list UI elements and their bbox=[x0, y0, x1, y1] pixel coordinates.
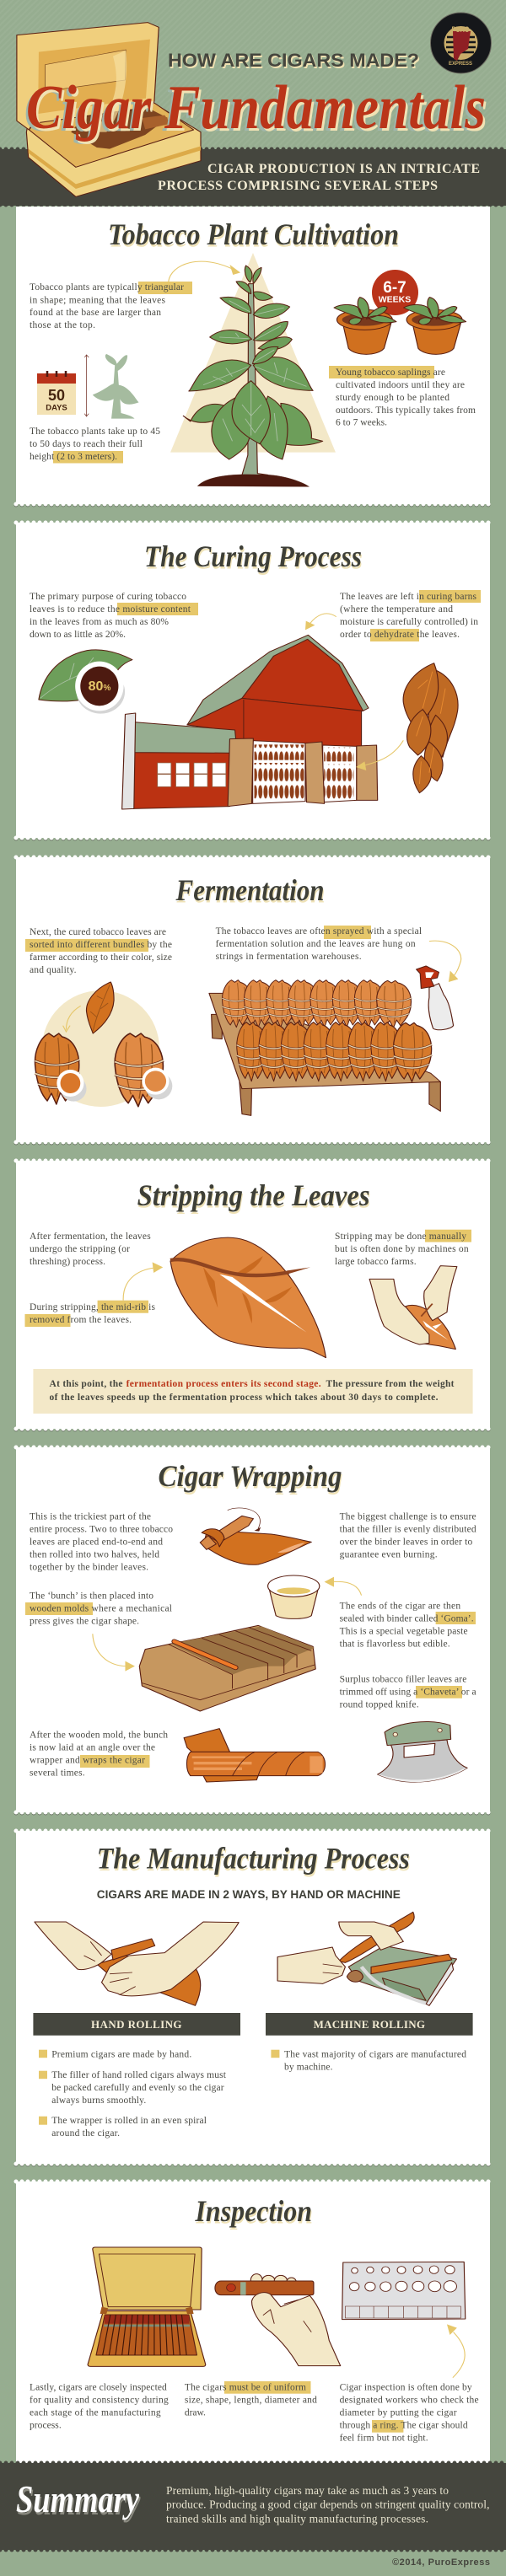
text: plant height: to 50 days to reach their full bbox=[30, 439, 143, 449]
text: trickiest part: leaves are placed end-to-end and bbox=[30, 1538, 163, 1548]
summary title: Summary bbox=[17, 2480, 141, 2523]
panel: manufacturing process bbox=[16, 1831, 490, 2165]
text: biggest challenge: The biggest challenge is to ensure bbox=[340, 1512, 476, 1522]
text: triangular shape: in shape; meaning that the leaves bbox=[30, 295, 166, 305]
text: triangular shape: Tobacco plants are typically triangular bbox=[30, 282, 184, 292]
text: spraying: strings in fermentation warehouses. bbox=[216, 952, 362, 962]
tagline: HOW ARE CIGARS MADE? bbox=[168, 50, 419, 71]
chaveta knife bbox=[378, 1722, 467, 1782]
text: curing barns bbox=[340, 590, 481, 641]
text: manual bbox=[335, 1230, 471, 1267]
list: hand rolling: around the cigar. bbox=[51, 2128, 120, 2139]
text: goma: The ends of the cigar are then bbox=[340, 1602, 460, 1612]
text: ring check: designated workers who check the bbox=[340, 2396, 479, 2406]
icon: leaf with 80%: 80% bbox=[89, 679, 110, 694]
hand rolling illustration bbox=[35, 1922, 239, 2005]
text: trickiest part: entire process. Two to three tobacco bbox=[30, 1525, 173, 1535]
heading: The Manufacturing Process bbox=[97, 1842, 410, 1876]
panel: inspection bbox=[16, 2182, 490, 2465]
text: trickiest part: This is the trickiest part of the bbox=[30, 1512, 151, 1522]
ring gauge bbox=[342, 2262, 466, 2378]
heading: Stripping the Leaves bbox=[138, 1180, 371, 1214]
panel: stripping the leaves bbox=[16, 1161, 490, 1430]
text: plant height bbox=[30, 427, 160, 464]
text: threshing bbox=[30, 1232, 151, 1267]
text: wrap the cigar: is now laid at an angle over the bbox=[30, 1743, 155, 1753]
text: chaveta: trimmed off using a ‘Chaveta’ or a bbox=[340, 1688, 476, 1698]
text: saplings: outdoors. This typically takes from bbox=[336, 405, 476, 416]
machine rolling label bbox=[266, 2013, 473, 2036]
list: machine rolling: The vast majority of cigars are manufactured bbox=[284, 2049, 466, 2059]
callout: second stage bbox=[33, 1369, 473, 1414]
summary band bbox=[0, 2463, 506, 2550]
text: saplings: 6 to 7 weeks. bbox=[336, 418, 387, 428]
text: manual: but is often done by machines on bbox=[335, 1244, 469, 1254]
icon: 6-7 weeks badge and pots bbox=[334, 270, 466, 354]
text: goma: that is flavorless but edible. bbox=[340, 1640, 450, 1650]
text: quality inspection: Lastly, cigars are closely inspected bbox=[30, 2383, 167, 2393]
text: saplings: cultivated indoors until they are bbox=[336, 380, 465, 390]
text: uniform size: The cigars must be of uniform bbox=[185, 2383, 306, 2393]
text: ring check: diameter by putting the cigar bbox=[340, 2408, 457, 2418]
badge logo: PURO bbox=[452, 25, 469, 34]
panel: cigar wrapping bbox=[16, 1447, 490, 1813]
spray bottle bbox=[428, 984, 454, 1030]
text: saplings bbox=[329, 366, 476, 428]
text: curing barns: order to dehydrate the leaves. bbox=[340, 630, 460, 640]
subtitle: CIGAR PRODUCTION IS AN INTRICATE bbox=[207, 162, 480, 176]
text: wrap the cigar: After the wooden mold, the bunch bbox=[30, 1731, 168, 1741]
list: hand rolling: Premium cigars are made by hand. bbox=[51, 2049, 191, 2059]
text: plant height: The tobacco plants take up to 45 bbox=[30, 427, 160, 437]
header bbox=[0, 0, 506, 206]
text: ring check bbox=[340, 2383, 479, 2444]
callout: second stage: of the leaves speeds up the fermentation process which takes about 30 days to complete. bbox=[49, 1393, 439, 1403]
text: threshing: undergo the stripping (or bbox=[30, 1244, 130, 1254]
text: goma: This is a special vegetable paste bbox=[340, 1627, 468, 1637]
machine rolling label: MACHINE ROLLING bbox=[314, 2018, 425, 2031]
text: curing barns: (where the temperature and bbox=[340, 604, 453, 614]
text: quality inspection: for quality and consistency during bbox=[30, 2396, 169, 2406]
text: biggest challenge bbox=[340, 1512, 476, 1560]
icon: calendar 50 days: 50 bbox=[48, 387, 65, 404]
summary title: Summary bbox=[16, 2477, 139, 2520]
text: spraying: The tobacco leaves are often sprayed with a special bbox=[216, 926, 422, 936]
text: biggest challenge: guarantee even burning. bbox=[340, 1550, 438, 1560]
callout: second stage: The pressure from the weight bbox=[326, 1379, 455, 1389]
summary text: Premium, high-quality cigars may take as much as 3 years to bbox=[166, 2484, 449, 2497]
copyright: ©2014, PuroExpress bbox=[392, 2557, 490, 2568]
heading: Tobacco Plant Cultivation bbox=[108, 217, 399, 251]
wrapping illustrations bbox=[93, 1508, 467, 1782]
text: saplings: sturdy enough to be planted bbox=[336, 393, 449, 403]
callout: second stage: fermentation process enters its second stage. bbox=[126, 1379, 321, 1389]
text: wooden molds: wooden molds where a mechanical bbox=[30, 1603, 172, 1613]
panel: fermentation bbox=[16, 857, 490, 1143]
barn illustration bbox=[122, 614, 458, 809]
text: uniform size: draw. bbox=[185, 2408, 206, 2418]
callout: second stage: At this point, the bbox=[49, 1379, 123, 1389]
text: quality inspection: process. bbox=[30, 2421, 62, 2431]
text: curing barns: The leaves are left in curing barns bbox=[340, 592, 477, 602]
text: quality inspection: each stage of the manufacturing bbox=[30, 2408, 161, 2418]
hanging leaves bbox=[403, 663, 458, 793]
list: machine rolling bbox=[271, 2049, 466, 2072]
text: wooden molds: The ‘bunch’ is then placed into bbox=[30, 1591, 153, 1601]
text: saplings: Young tobacco saplings are bbox=[336, 368, 445, 378]
text: threshing: After fermentation, the leaves bbox=[30, 1232, 151, 1242]
text: goma: sealed with binder called ‘Goma’. bbox=[340, 1614, 474, 1624]
sorting illustration bbox=[35, 982, 172, 1107]
summary text: trained skills and high quality manufacturing processes. bbox=[166, 2512, 428, 2525]
list: hand rolling bbox=[39, 2049, 227, 2139]
text: uniform size bbox=[185, 2381, 317, 2418]
icon: 6-7 weeks badge and pots: 6-7 bbox=[383, 279, 406, 297]
days bbox=[93, 354, 139, 419]
text: threshing: threshing) process. bbox=[30, 1257, 105, 1267]
text: ring check: through a ring. The cigar should bbox=[340, 2421, 468, 2431]
text: sorting: sorted into different bundles by the bbox=[30, 940, 172, 950]
text: mid-rib: removed from the leaves. bbox=[30, 1315, 132, 1325]
heading: Fermentation bbox=[176, 875, 326, 909]
icon: leaf with 80% bbox=[39, 650, 132, 714]
summary text: produce. Producing a good cigar depends on stringent quality control, bbox=[166, 2498, 489, 2511]
text: sorting: and quality. bbox=[30, 965, 77, 975]
goma cup bbox=[268, 1575, 362, 1618]
hand holding cigar bbox=[215, 2274, 341, 2366]
text: mid-rib bbox=[25, 1301, 156, 1327]
icon: calendar 50 days: DAYS bbox=[46, 403, 67, 413]
heading: Inspection bbox=[195, 2194, 312, 2228]
text: triangular shape: found at the base are larger than bbox=[30, 308, 161, 318]
panel: curing process bbox=[16, 523, 490, 839]
cigar box with cigars bbox=[88, 2247, 206, 2366]
hand rolling label bbox=[33, 2013, 240, 2036]
subheading: CIGARS ARE MADE IN 2 WAYS, BY HAND OR MACHINE bbox=[97, 1887, 401, 1901]
subtitle: PROCESS COMPRISING SEVERAL STEPS bbox=[158, 179, 438, 193]
list: machine rolling: by machine. bbox=[284, 2062, 333, 2072]
text: moisture: in the leaves from as much as 80% bbox=[30, 617, 169, 627]
heading: The Curing Process bbox=[144, 539, 362, 573]
heading: The Manufacturing Process bbox=[98, 1843, 411, 1877]
text: quality inspection bbox=[30, 2383, 169, 2431]
heading: Inspection bbox=[196, 2197, 313, 2230]
heading: Fermentation bbox=[175, 873, 324, 907]
text: manual: Stripping may be done manually bbox=[335, 1232, 466, 1242]
text: moisture: down to as little as 20%. bbox=[30, 630, 126, 640]
text: ring check: Cigar inspection is often done by bbox=[340, 2383, 472, 2393]
text: plant height: height (2 to 3 meters). bbox=[30, 452, 117, 462]
text: moisture: leaves is to reduce the moisture content bbox=[30, 604, 191, 614]
text: sorting bbox=[25, 927, 172, 975]
drying rack illustration bbox=[209, 941, 461, 1115]
text: wooden molds: press gives the cigar shape. bbox=[30, 1616, 139, 1626]
list: hand rolling: The wrapper is rolled in an even spiral bbox=[51, 2116, 207, 2126]
leaf illustration bbox=[123, 1237, 457, 1358]
heading: Stripping the Leaves bbox=[137, 1178, 370, 1212]
header band bbox=[0, 149, 506, 206]
plant illustration bbox=[84, 253, 336, 486]
heading: Cigar Wrapping bbox=[159, 1462, 342, 1495]
heading: Tobacco Plant Cultivation bbox=[109, 219, 400, 253]
heading: Cigar Wrapping bbox=[159, 1459, 342, 1493]
badge logo: EXPRESS bbox=[449, 62, 472, 67]
text: goma bbox=[340, 1602, 476, 1650]
text: chaveta: Surplus tobacco filler leaves are bbox=[340, 1675, 466, 1685]
heading: The Curing Process bbox=[145, 541, 363, 575]
icon: calendar 50 days bbox=[37, 371, 76, 415]
text: wrap the cigar: wrapper and wraps the cigar bbox=[30, 1756, 145, 1766]
tagline: HOW ARE CIGARS MADE? bbox=[169, 51, 420, 72]
text: ring check: feel firm but not tight. bbox=[340, 2434, 428, 2444]
text: chaveta bbox=[340, 1675, 476, 1710]
text: sorting: farmer according to their color, size bbox=[30, 953, 172, 963]
text: uniform size: size, shape, length, diameter and bbox=[185, 2396, 317, 2406]
subtitle bbox=[158, 162, 480, 193]
text: triangular shape: those at the top. bbox=[30, 320, 95, 330]
cigar box illustration bbox=[17, 23, 201, 196]
text: triangular shape bbox=[30, 282, 192, 330]
text: moisture: The primary purpose of curing tobacco bbox=[30, 592, 186, 602]
icon: 6-7 weeks badge and pots: WEEKS bbox=[379, 295, 411, 305]
binder leaf with filler bbox=[200, 1508, 311, 1564]
badge logo bbox=[430, 13, 491, 73]
hand rolling label: HAND ROLLING bbox=[91, 2018, 182, 2031]
wooden mold bbox=[93, 1625, 315, 1711]
text: sorting: Next, the cured tobacco leaves are bbox=[30, 927, 166, 937]
text: chaveta: round topped knife. bbox=[340, 1700, 419, 1710]
text: trickiest part bbox=[30, 1512, 173, 1573]
text: trickiest part: together by the binder leaves. bbox=[30, 1563, 148, 1573]
text: wooden molds bbox=[25, 1591, 172, 1626]
text: wrap the cigar bbox=[30, 1731, 168, 1779]
text: biggest challenge: over the binder leaves in order to bbox=[340, 1538, 472, 1548]
text: trickiest part: then rolled into two halves, held bbox=[30, 1550, 159, 1560]
panel: tobacco plant cultivation bbox=[16, 207, 490, 505]
text: spraying: fermentation solution and the leaves are hung on bbox=[216, 939, 416, 949]
text: spraying bbox=[216, 926, 422, 962]
list: hand rolling: be packed carefully and evenly so the cigar bbox=[51, 2083, 224, 2093]
summary text bbox=[166, 2484, 489, 2525]
text: manual: large tobacco farms. bbox=[335, 1257, 417, 1267]
text: moisture bbox=[30, 592, 198, 640]
list: hand rolling: The filler of hand rolled cigars always must bbox=[51, 2070, 227, 2080]
text: curing barns: moisture is carefully controlled) in bbox=[340, 617, 478, 627]
text: biggest challenge: that the filler is evenly distributed bbox=[340, 1525, 476, 1535]
text: wrap the cigar: several times. bbox=[30, 1768, 85, 1779]
wrapped cigar bbox=[184, 1729, 326, 1782]
machine rolling illustration bbox=[277, 1912, 456, 2005]
list: hand rolling: always burns smoothly. bbox=[51, 2096, 146, 2106]
text: mid-rib: During stripping, the mid-rib is bbox=[30, 1302, 156, 1312]
